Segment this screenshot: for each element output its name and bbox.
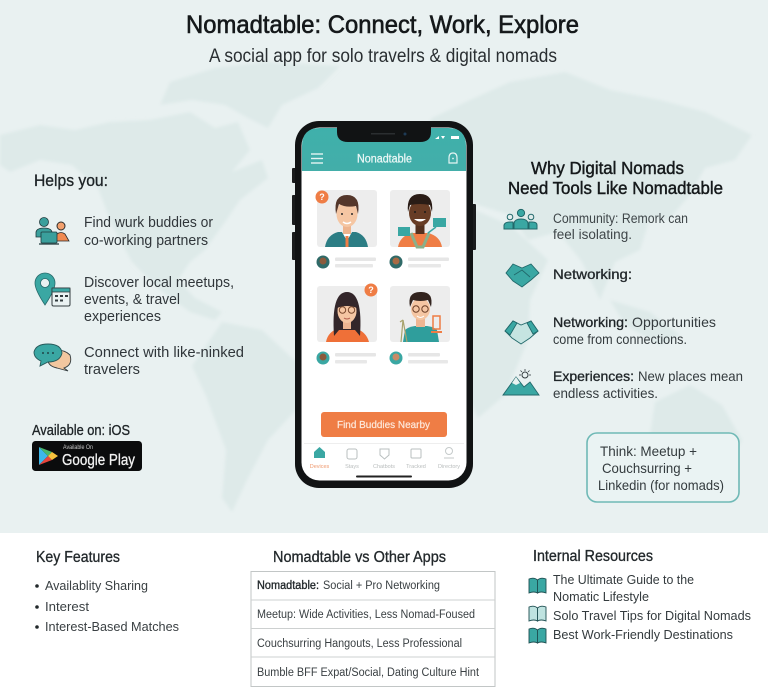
bottom panel xyxy=(0,533,768,693)
icon: handshake outline xyxy=(505,321,538,344)
text: connect with travelers: Connect with like-ninked xyxy=(84,344,244,361)
icon: chat bubbles xyxy=(34,344,71,371)
callout: think: Think: Meetup + xyxy=(600,443,697,459)
text: ultimate guide xyxy=(553,572,694,604)
text: community: Community: Remork can xyxy=(553,211,688,226)
callout: think: Linkedin (for nomads) xyxy=(598,477,724,493)
table: Social + Pro Networking xyxy=(323,580,440,592)
callout: think: Couchsurring + xyxy=(602,460,692,476)
profile card: man with glasses xyxy=(390,286,450,342)
panel: internal resources xyxy=(529,548,751,643)
text: networking: Networking: xyxy=(553,266,632,282)
profile meta row 2 xyxy=(316,352,448,364)
icon: book xyxy=(529,628,546,643)
icon: location pin and calendar xyxy=(35,273,70,306)
heading: helps you: Helps you: xyxy=(34,172,108,190)
callout: think xyxy=(587,433,739,502)
icon: community xyxy=(504,209,537,229)
background panel xyxy=(0,0,768,533)
bottom navigation: Devices xyxy=(310,464,330,470)
icon: handshake xyxy=(506,264,539,287)
phone mockup xyxy=(292,121,476,488)
heading: why digital nomads: Need Tools Like Nomadtable xyxy=(508,178,723,198)
table: Bumble BFF Expat/Social, Dating Culture Hint xyxy=(257,667,480,679)
text: experiences: Experiences: xyxy=(553,368,634,384)
heading: why digital nomads: Why Digital Nomads xyxy=(531,158,684,178)
phone body xyxy=(292,121,476,488)
text: experiences: New places mean xyxy=(638,368,743,384)
app header: Nonadtable xyxy=(357,154,412,166)
icon: open book xyxy=(529,606,546,621)
heading: why digital nomads xyxy=(508,158,723,198)
bottom navigation xyxy=(304,444,464,478)
bottom navigation: Stays xyxy=(345,464,359,470)
text: connect with travelers xyxy=(84,344,244,378)
text: find work buddies: Find wurk buddies or xyxy=(84,214,213,231)
icon: mountains and sun xyxy=(503,369,539,395)
text: find work buddies: co-working partners xyxy=(84,232,208,249)
text: find work buddies xyxy=(84,214,213,249)
text: community xyxy=(553,211,688,242)
text: discover local meetups: events, & travel xyxy=(84,291,180,308)
text: experiences xyxy=(553,368,743,401)
profile card: smiling man xyxy=(390,190,450,247)
availability label: Available on: iOS xyxy=(32,423,130,439)
question badge: ? xyxy=(319,192,325,202)
list: features: Interest-Based Matches xyxy=(45,619,179,634)
text: experiences: endless activities. xyxy=(553,385,658,401)
heading: key features: Key Features xyxy=(36,549,120,566)
text: networking opportunities: come from connections. xyxy=(553,331,687,347)
badge: google play: Available On xyxy=(63,445,93,451)
bottom navigation: Chatbots xyxy=(373,464,395,470)
badge: google play xyxy=(32,441,142,471)
bottom navigation: Tracked xyxy=(406,464,426,470)
list: features: Interest xyxy=(45,599,89,614)
text: work-friendly destinations: Best Work-Friendly Destinations xyxy=(553,627,733,642)
button: find buddies nearby xyxy=(321,412,447,437)
panel: why digital nomads xyxy=(503,158,743,502)
app header xyxy=(302,127,466,171)
text: ultimate guide: The Ultimate Guide to the xyxy=(553,572,694,587)
list: features xyxy=(35,578,179,634)
subtitle: A social app for solo travelrs & digital nomads xyxy=(209,46,557,67)
heading: comparison: Nomadtable vs Other Apps xyxy=(273,549,446,566)
text: ultimate guide: Nomatic Lifestyle xyxy=(553,589,649,604)
text: community: feel isolating. xyxy=(553,227,632,242)
text: solo travel tips: Solo Travel Tips for Digital Nomads xyxy=(553,608,751,623)
text: connect with travelers: travelers xyxy=(84,361,140,378)
profile card: woman with glasses xyxy=(317,284,378,342)
panel: helps you xyxy=(34,172,244,378)
table: Meetup: Wide Activities, Less Nomad-Foused xyxy=(257,609,475,621)
button: find buddies nearby: Find Buddies Nearby xyxy=(337,419,431,431)
title: Nomadtable: Connect, Work, Explore xyxy=(186,11,579,39)
icon: work buddies xyxy=(36,218,69,244)
question badge: ? xyxy=(368,285,374,295)
profile meta row 1 xyxy=(316,256,449,268)
text: networking opportunities xyxy=(553,314,716,347)
table xyxy=(251,572,495,686)
text: discover local meetups: Discover local meetups, xyxy=(84,274,234,291)
text: networking opportunities: Networking: xyxy=(553,314,628,330)
icon: book xyxy=(529,578,546,593)
text: discover local meetups: experiences xyxy=(84,308,161,325)
text: networking opportunities: Opportunities xyxy=(632,314,716,330)
list: features: Availablity Sharing xyxy=(45,578,148,593)
badge: google play: Google Play xyxy=(62,452,135,469)
profile card: man in suit xyxy=(316,190,377,247)
table: Couchsurring Hangouts, Less Professional xyxy=(257,638,462,650)
panel: comparison table xyxy=(251,549,495,686)
world map xyxy=(0,62,752,512)
table: Nomadtable: xyxy=(257,580,319,592)
heading: internal resources: Internal Resources xyxy=(533,548,653,565)
bottom navigation: Directory xyxy=(438,464,460,470)
text: discover local meetups xyxy=(84,274,234,325)
panel: key features xyxy=(35,549,179,634)
